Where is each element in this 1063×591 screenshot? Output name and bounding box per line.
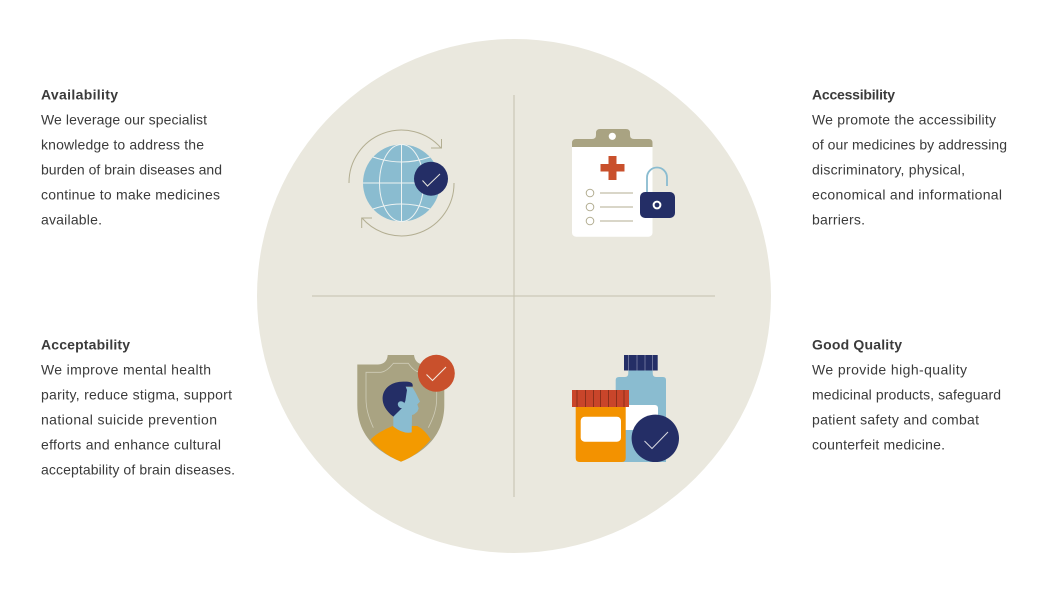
text block: Accessibility: Accessibility — [812, 86, 895, 102]
text block: Accessibility — [812, 86, 1007, 228]
text block: Acceptability: efforts and enhance cultural — [41, 436, 221, 452]
text block: Good Quality: counterfeit medicine. — [812, 436, 945, 452]
text block: Availability: Availability — [41, 86, 118, 102]
text block: Availability: knowledge to address the — [41, 136, 204, 152]
central circle — [257, 39, 771, 553]
text block: Acceptability: acceptability of brain diseases. — [41, 462, 235, 478]
text block: Accessibility: barriers. — [812, 212, 865, 228]
icon: clipboard with padlock — [572, 129, 675, 237]
text block: Availability: available. — [41, 212, 102, 228]
icon: shield with person and check — [357, 355, 455, 462]
text block: Good Quality — [812, 336, 1001, 452]
text block: Good Quality: medicinal products, safeguard — [812, 386, 1001, 402]
text block: Availability: burden of brain diseases and — [41, 162, 222, 178]
text block: Availability: We leverage our specialist — [41, 112, 207, 128]
text block: Acceptability — [41, 336, 235, 478]
text block: Good Quality: We provide high-quality — [812, 362, 967, 378]
text block: Accessibility: discriminatory, physical, — [812, 162, 965, 178]
icon: globe with arrows and check — [349, 130, 454, 236]
text block: Accessibility: economical and informational — [812, 186, 1002, 202]
text block: Acceptability: parity, reduce stigma, support — [41, 386, 232, 402]
text block: Accessibility: of our medicines by addressing — [812, 136, 1007, 152]
text block: Accessibility: We promote the accessibility — [812, 112, 996, 128]
text block: Good Quality: patient safety and combat — [812, 412, 979, 428]
text block: Good Quality: Good Quality — [812, 336, 902, 352]
text block: Acceptability: We improve mental health — [41, 362, 211, 378]
text block: Availability: continue to make medicines — [41, 186, 220, 202]
icon: medicine bottles with check — [572, 355, 679, 462]
text block: Availability — [41, 86, 222, 228]
text block: Acceptability: national suicide prevention — [41, 412, 217, 428]
text block: Acceptability: Acceptability — [41, 336, 130, 352]
